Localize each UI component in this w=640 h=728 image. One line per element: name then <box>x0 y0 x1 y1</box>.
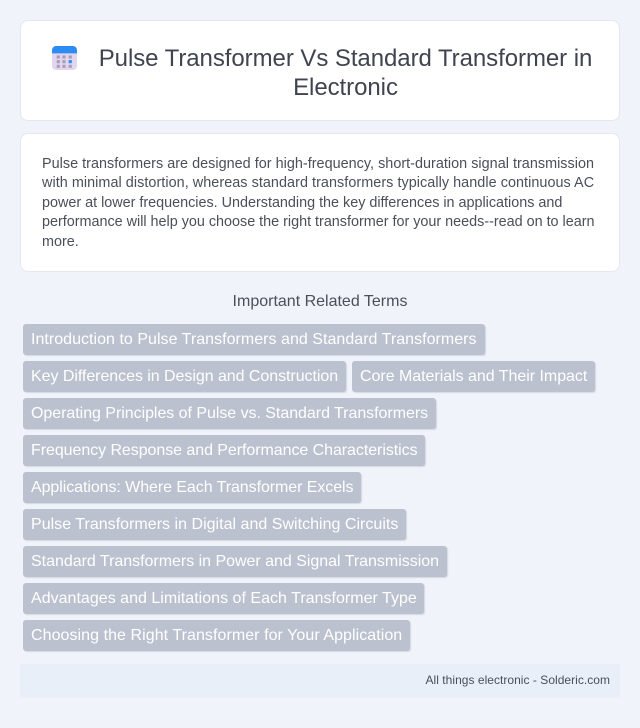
chip <box>23 620 410 651</box>
chip <box>23 324 485 355</box>
icon: calendar grid <box>52 46 77 70</box>
footer text: All things electronic - Solderic.com <box>426 673 610 687</box>
chip <box>23 472 361 503</box>
panel: title card <box>20 20 620 121</box>
chip: Operating Principles of Pulse vs. Standard Transformers <box>31 405 428 422</box>
chip: Applications: Where Each Transformer Excels <box>31 479 353 496</box>
intro text: performance will help you choose the right transformer for your needs--read on to learn <box>42 214 594 230</box>
chip <box>23 583 424 614</box>
intro text: with minimal distortion, whereas standard transformers typically handle continuous AC <box>42 175 594 191</box>
chip: Core Materials and Their Impact <box>360 368 587 385</box>
chip: Pulse Transformers in Digital and Switching Circuits <box>31 516 398 533</box>
chip: Choosing the Right Transformer for Your Application <box>31 627 402 644</box>
intro text: Pulse transformers are designed for high-frequency, short-duration signal transmission <box>42 156 594 172</box>
title: Pulse Transformer Vs Standard Transformer in Electronic <box>99 45 592 101</box>
intro text <box>42 156 594 250</box>
chip <box>23 509 406 540</box>
chip <box>352 361 595 392</box>
footer bar <box>20 664 620 698</box>
chip: Frequency Response and Performance Characteristics <box>31 442 418 459</box>
chip <box>23 361 346 392</box>
chip <box>23 435 425 466</box>
chip: Introduction to Pulse Transformers and Standard Transformers <box>31 331 477 348</box>
intro text: power at lower frequencies. Understanding the key differences in applications and <box>42 195 562 211</box>
panel: term chips <box>23 324 596 652</box>
heading: important related terms: Important Related Terms <box>233 293 407 310</box>
chip: Standard Transformers in Power and Signal Transmission <box>31 553 439 570</box>
panel: intro card <box>20 133 620 272</box>
chip <box>23 398 436 429</box>
chip: Key Differences in Design and Construction <box>31 368 338 385</box>
chip <box>23 546 447 577</box>
chip: Advantages and Limitations of Each Transformer Type <box>31 590 417 607</box>
intro text: more. <box>42 234 79 250</box>
